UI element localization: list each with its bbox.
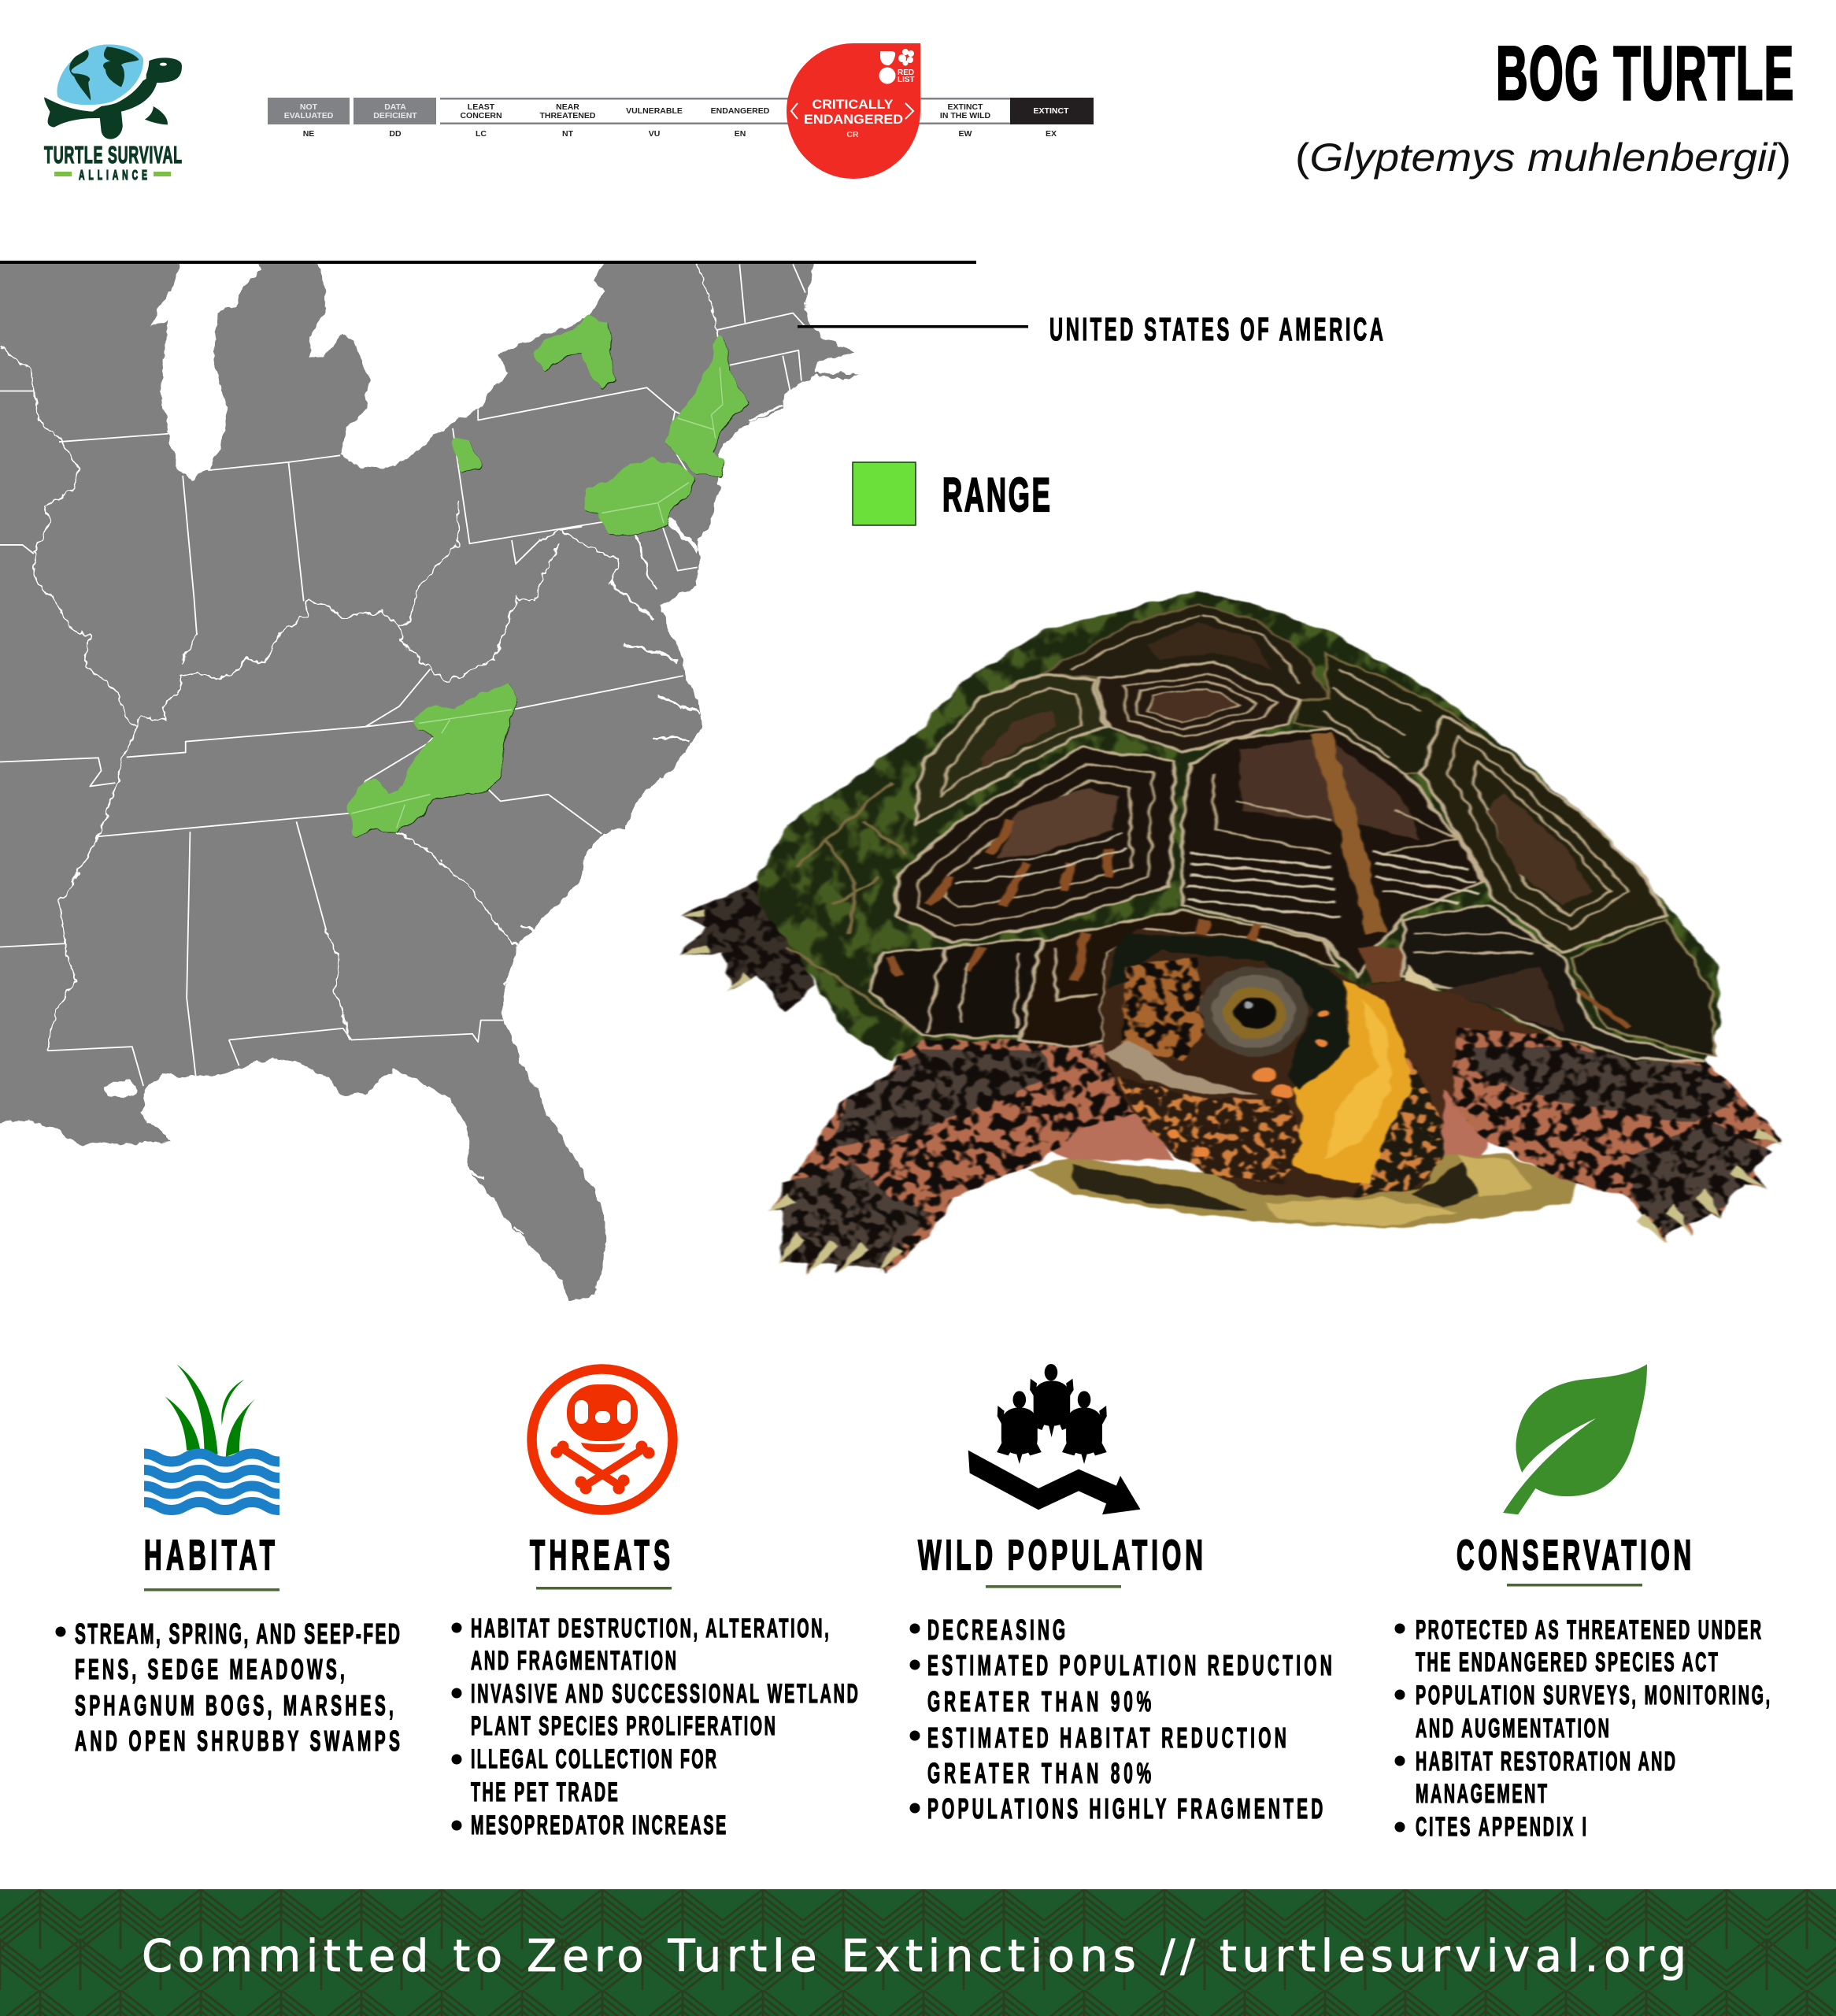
DD segment — [354, 98, 436, 139]
bullet list: HABITAT RESTORATION AND — [1416, 1746, 1675, 1776]
straight state borders — [0, 264, 805, 1086]
icon: turtles above declining arrow — [968, 1364, 1140, 1514]
middle categories: NT — [562, 129, 574, 139]
footer banner — [0, 1889, 1836, 2016]
Lake Michigan — [150, 252, 261, 479]
plastron — [1027, 1151, 1577, 1228]
EX segment: EX — [1046, 129, 1057, 139]
range: southern Appalachians — [351, 689, 513, 832]
bullet list: ESTIMATED HABITAT REDUCTION — [927, 1722, 1286, 1755]
NE segment: NOT — [300, 102, 318, 112]
icon: leaf — [1503, 1364, 1647, 1514]
bullet list: THE ENDANGERED SPECIES ACT — [1416, 1647, 1718, 1677]
land and lakes — [0, 252, 859, 1303]
scute: front marginals — [870, 910, 1339, 1047]
bullet list: PROTECTED AS THREATENED UNDER — [1416, 1614, 1761, 1644]
Lakes Huron and Erie — [309, 252, 606, 469]
range: Hudson Valley and New Jersey — [669, 340, 743, 474]
bullet list: GREATER THAN 80% — [927, 1758, 1151, 1790]
left turtle — [997, 1391, 1042, 1464]
DD segment: DD — [389, 129, 402, 139]
logo: Turtle Survival Alliance — [44, 43, 182, 183]
icon: grass and water — [144, 1364, 279, 1510]
wild population panel — [910, 1364, 1332, 1825]
underline — [1507, 1584, 1642, 1586]
bullet list: AND OPEN SHRUBBY SWAMPS — [75, 1725, 400, 1758]
critically endangered badge: LIST — [898, 76, 915, 84]
underline — [144, 1588, 279, 1591]
shell rim highlights — [788, 783, 922, 1036]
middle categories: EXTINCT — [948, 102, 983, 112]
icon: skull and crossbones — [532, 1369, 672, 1510]
scute: right costal — [1421, 717, 1667, 953]
bullet list — [452, 1613, 858, 1840]
turtle illustration — [678, 591, 1783, 1275]
left front leg — [770, 1028, 1153, 1273]
water waves — [144, 1454, 279, 1510]
DD segment: DEFICIENT — [373, 111, 417, 120]
range: western Pennsylvania — [456, 442, 478, 468]
leader line — [798, 325, 1028, 328]
bullet list: PLANT SPECIES PROLIFERATION — [471, 1710, 775, 1740]
head — [1101, 929, 1443, 1198]
country label: UNITED STATES OF AMERICA — [1049, 313, 1383, 348]
heading: HABITAT — [144, 1532, 275, 1579]
bullet list: GREATER THAN 90% — [927, 1686, 1151, 1718]
middle categories: LEAST — [468, 102, 495, 112]
NE segment: NE — [303, 129, 314, 139]
heading: THREATS — [530, 1532, 670, 1579]
critically endangered badge — [787, 43, 920, 179]
bullet list — [910, 1614, 1332, 1825]
middle categories: VU — [649, 129, 660, 139]
throat — [1116, 1075, 1301, 1184]
footer background — [0, 1889, 1836, 2016]
bullet list: POPULATION SURVEYS, MONITORING, — [1416, 1680, 1770, 1710]
critically endangered badge: CR — [846, 130, 859, 139]
land — [0, 252, 859, 1303]
right front leg — [1450, 1028, 1782, 1243]
scute: vertebral — [1181, 728, 1484, 984]
neck — [1354, 1024, 1443, 1195]
middle categories — [440, 98, 1015, 139]
bullet list: DECREASING — [927, 1614, 1065, 1647]
coastal inlets — [467, 408, 782, 1235]
range: Great Lakes New York — [537, 320, 612, 384]
habitat panel — [55, 1364, 400, 1758]
underline — [536, 1587, 672, 1589]
orange spots — [1168, 1010, 1330, 1158]
shell base — [758, 591, 1720, 1061]
bullet list: MANAGEMENT — [1416, 1778, 1547, 1808]
inner flesh — [1042, 1089, 1488, 1160]
logo sub-wordmark: ALLIANCE — [79, 168, 147, 183]
bullet list: AND AUGMENTATION — [1416, 1713, 1609, 1743]
bullet list: STREAM, SPRING, AND SEEP-FED — [75, 1618, 400, 1651]
logo ribbons — [54, 172, 171, 176]
middle categories: THREATENED — [540, 111, 596, 120]
heading: CONSERVATION — [1457, 1532, 1691, 1579]
under-shell shadow — [1109, 976, 1562, 1146]
beak — [1105, 1040, 1257, 1094]
bullet list: INVASIVE AND SUCCESSIONAL WETLAND — [471, 1678, 858, 1708]
range patches — [351, 320, 743, 832]
bullet list: AND FRAGMENTATION — [471, 1645, 676, 1675]
Lake Pontchartrain — [104, 1080, 138, 1099]
logo turtle mark — [44, 43, 182, 139]
threats panel — [452, 1369, 858, 1840]
middle categories: LC — [476, 129, 487, 139]
scute: upper left — [915, 674, 1105, 825]
rear claws — [678, 909, 751, 993]
grass blades — [165, 1364, 258, 1457]
eye — [1200, 967, 1307, 1056]
map: eastern United States range — [0, 252, 859, 1303]
bullet list: POPULATIONS HIGHLY FRAGMENTED — [927, 1793, 1323, 1825]
bullet list: ESTIMATED POPULATION REDUCTION — [927, 1650, 1332, 1682]
critically endangered badge: CRITICALLY — [813, 97, 894, 112]
bullet list — [1395, 1614, 1770, 1841]
scute: upper right — [1294, 653, 1510, 773]
middle categories: ENDANGERED — [711, 106, 770, 116]
middle categories: EW — [959, 129, 972, 139]
NE segment — [268, 98, 350, 139]
legend label: RANGE — [942, 469, 1050, 521]
middle categories: EN — [735, 129, 746, 139]
bullet list: THE PET TRADE — [471, 1777, 618, 1807]
left claws — [768, 1191, 904, 1275]
NE segment: EVALUATED — [284, 111, 334, 120]
EX segment — [1010, 98, 1094, 139]
bullet list: HABITAT DESTRUCTION, ALTERATION, — [471, 1613, 829, 1643]
scientific name: (Glyptemys muhlenbergii ) — [1295, 135, 1791, 180]
DD segment: DATA — [384, 102, 406, 112]
scute: top — [1097, 662, 1301, 752]
IUCN red list status bar — [268, 43, 1094, 179]
scute: right rear marginals — [1402, 906, 1715, 1061]
middle categories: CONCERN — [460, 111, 502, 120]
EX segment: EXTINCT — [1034, 106, 1069, 116]
middle categories: VULNERABLE — [626, 106, 683, 116]
middle categories: NEAR — [556, 102, 579, 112]
cheek mottling — [1123, 958, 1205, 1061]
range: southeast Pennsylvania — [587, 462, 692, 530]
yellow neck patch — [1283, 979, 1413, 1184]
right claws — [1637, 1128, 1783, 1243]
middle categories: IN THE WILD — [940, 111, 990, 120]
critically endangered badge: RED — [898, 69, 914, 77]
legend swatch — [853, 462, 916, 525]
scute: left costal — [896, 747, 1175, 943]
borders over range — [351, 367, 723, 828]
declining arrow — [968, 1451, 1140, 1514]
underline — [986, 1585, 1121, 1588]
bullet list: MESOPREDATOR INCREASE — [471, 1810, 726, 1840]
river state borders — [0, 264, 717, 1051]
scute: dorsal peak — [1042, 604, 1328, 700]
top rule — [0, 261, 976, 264]
bullet list: SPHAGNUM BOGS, MARSHES, — [75, 1690, 394, 1722]
bullet list — [55, 1618, 400, 1758]
bullet list: ILLEGAL COLLECTION FOR — [471, 1744, 716, 1773]
heading: WILD POPULATION — [918, 1532, 1203, 1579]
right turtle — [1062, 1391, 1107, 1464]
head top — [1109, 934, 1350, 1089]
center turtle — [1030, 1364, 1075, 1437]
logo wordmark: TURTLE SURVIVAL — [44, 142, 182, 169]
title: BOG TURTLE — [1496, 30, 1793, 116]
conservation panel — [1395, 1364, 1770, 1841]
rear left leg — [680, 882, 814, 1012]
shell — [758, 591, 1720, 1061]
critically endangered badge: ENDANGERED — [804, 112, 903, 127]
bullet list: CITES APPENDIX I — [1416, 1811, 1586, 1841]
footer text: Committed to Zero Turtle Extinctions // turtlesurvival.org — [142, 1931, 1686, 1982]
bullet list: FENS, SEDGE MEADOWS, — [75, 1654, 345, 1686]
